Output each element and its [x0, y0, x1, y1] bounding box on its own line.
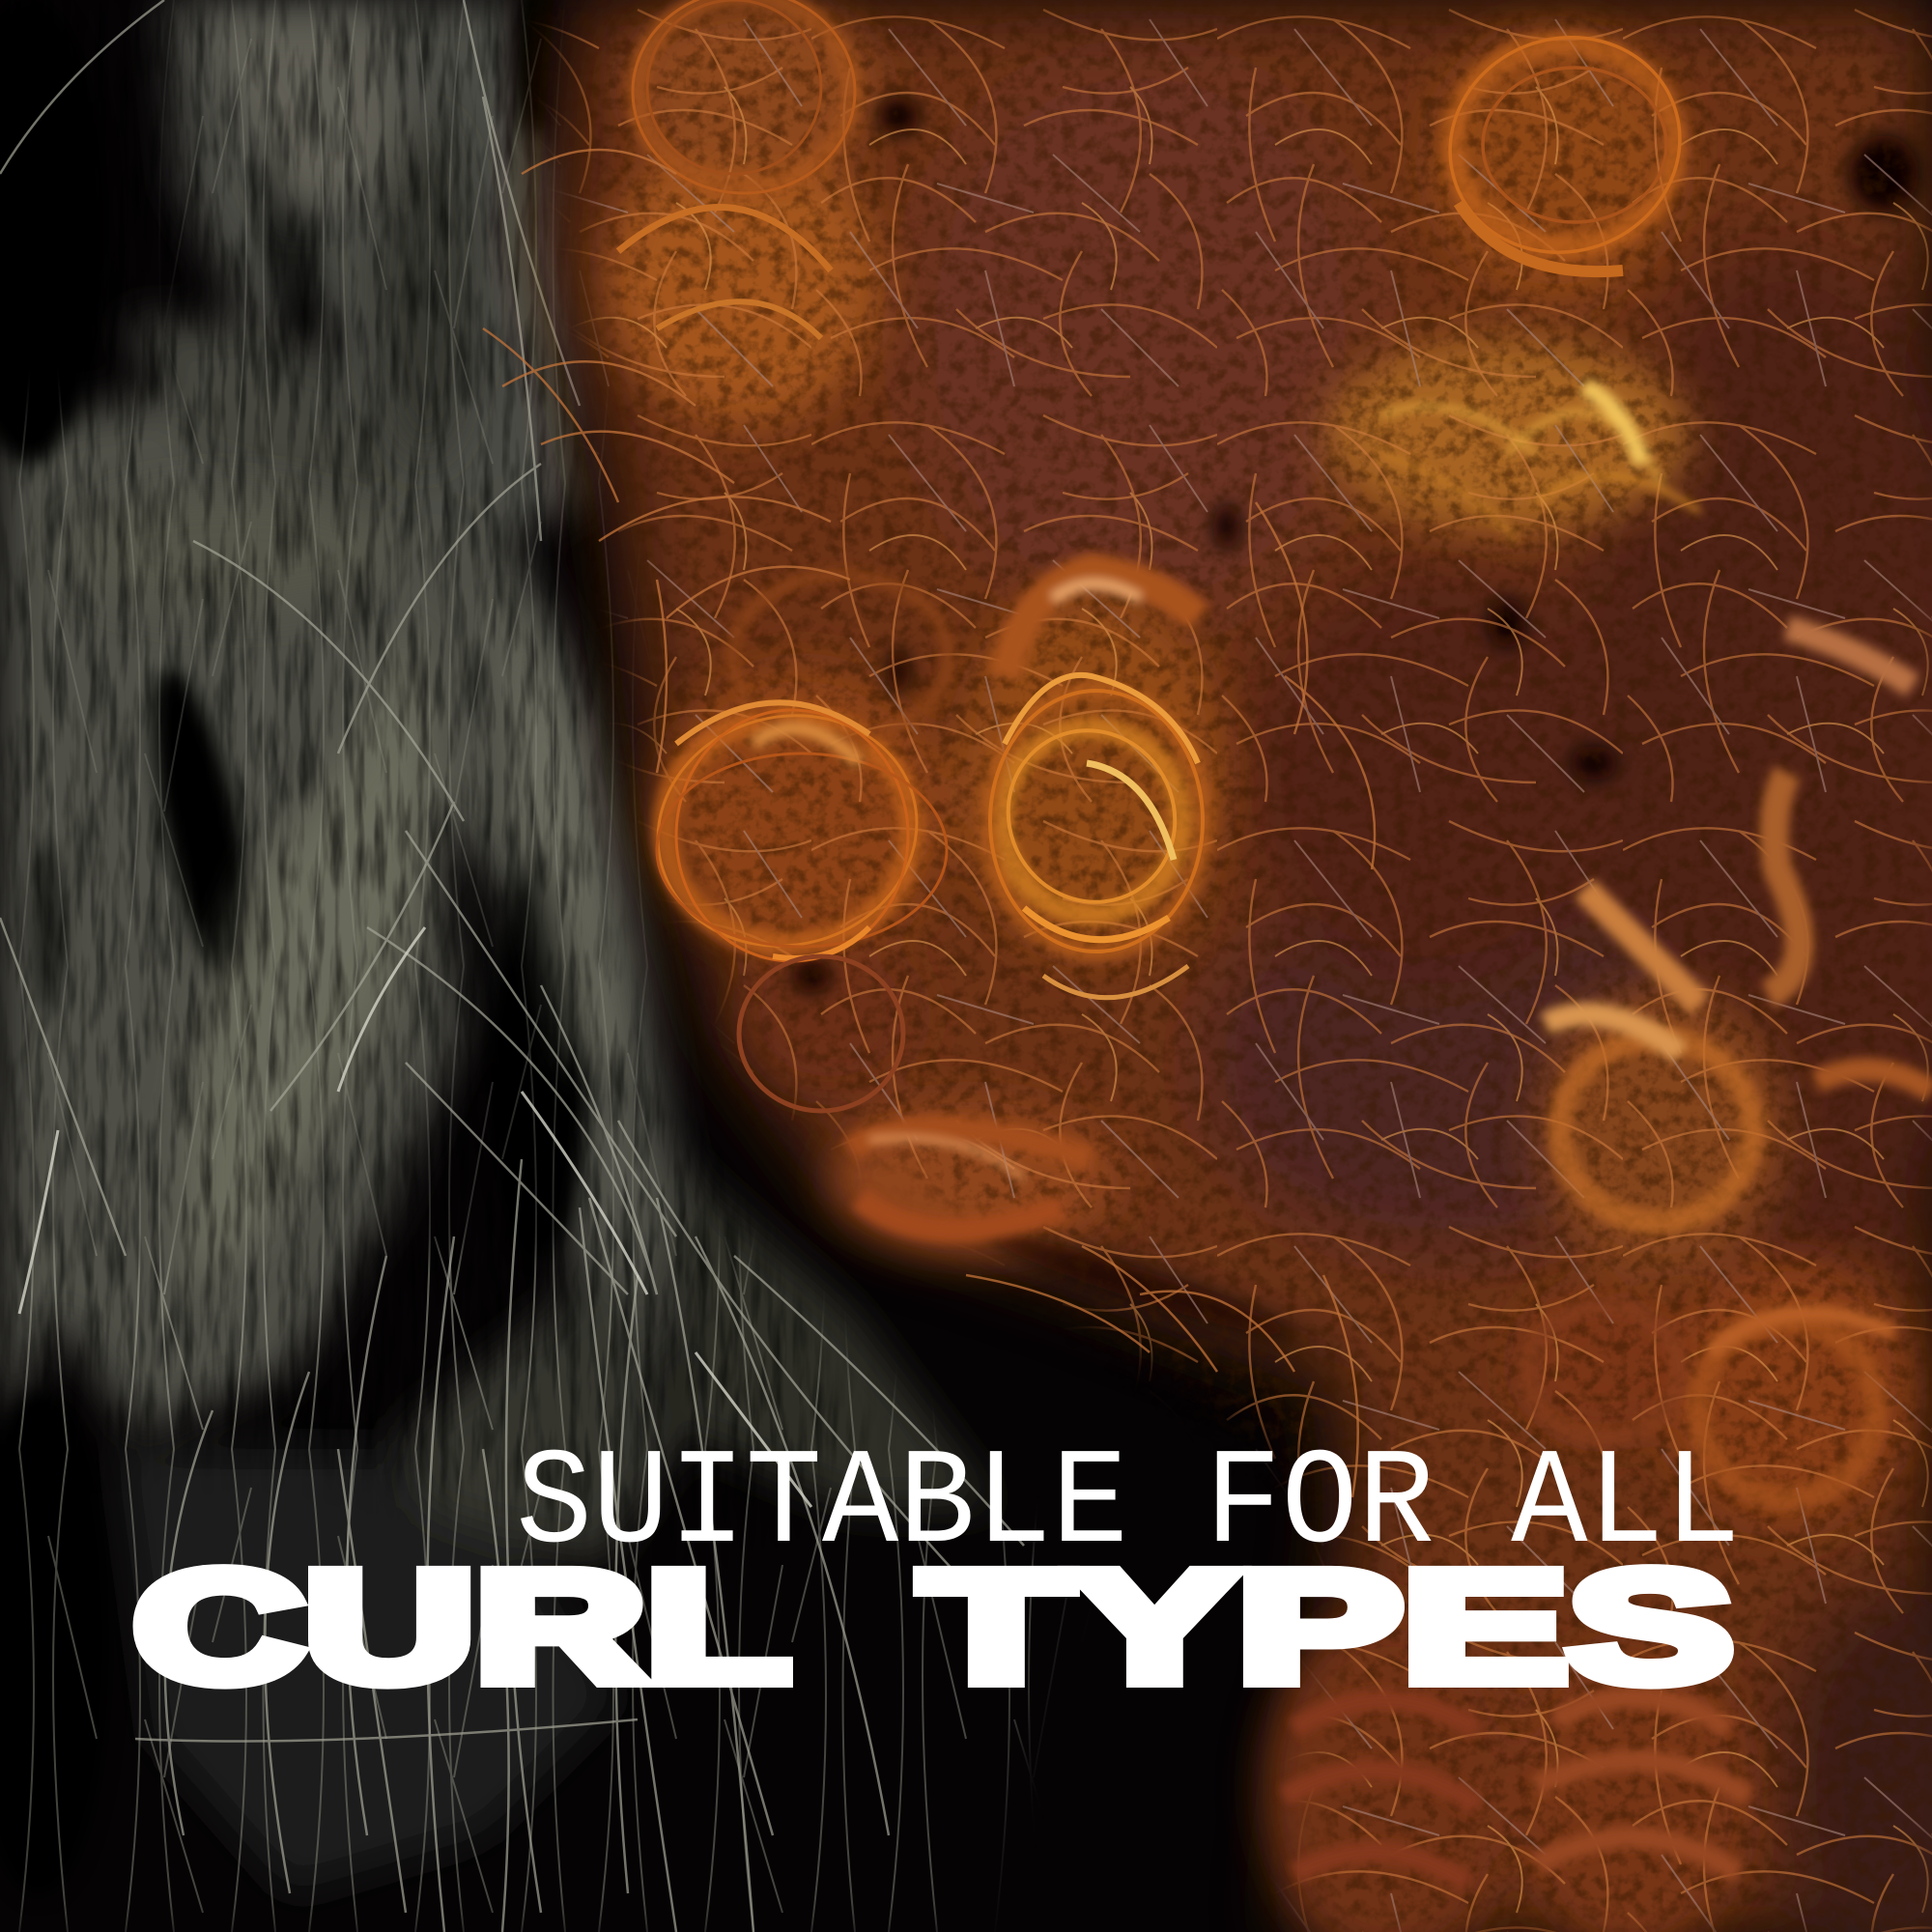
soft curl glow: [638, 0, 1876, 1499]
dark holes between curls: [792, 97, 1918, 1350]
dark gaps in grey hair: [0, 0, 589, 1893]
title word: types: TYPES: [921, 1538, 1733, 1715]
curl ring upper band: [753, 570, 1198, 763]
curl ring top left: [618, 0, 855, 338]
curl ring lower left: [739, 956, 903, 1111]
curl rings bottom right: [1285, 1313, 1893, 1884]
text block: headline: [133, 1429, 1741, 1715]
grey hair streak texture: [2, 0, 851, 1524]
panel: grey wavy hair: [0, 0, 1067, 1932]
curl ring lower right: [1546, 628, 1932, 1092]
curl bright tuft: [1381, 386, 1700, 541]
curl ring left: [632, 687, 947, 975]
title word: curl: CURL: [133, 1538, 790, 1715]
copper flyaway strands: [483, 150, 1375, 1497]
curl ring right: [977, 675, 1207, 998]
grey hair strands: [0, 0, 1024, 1932]
curl band bottom: [850, 1127, 1092, 1230]
bright copper masses: [609, 0, 1913, 1932]
grey bottom wisps: [18, 1236, 1067, 1932]
curl ring top right: [1420, 6, 1710, 284]
subtitle: SUITABLE FOR ALL: [516, 1429, 1741, 1582]
highlights on grey hair: [68, 19, 618, 1294]
grey hair fine strands: [18, 0, 676, 1457]
icon: large curl rings: [618, 0, 1932, 1884]
